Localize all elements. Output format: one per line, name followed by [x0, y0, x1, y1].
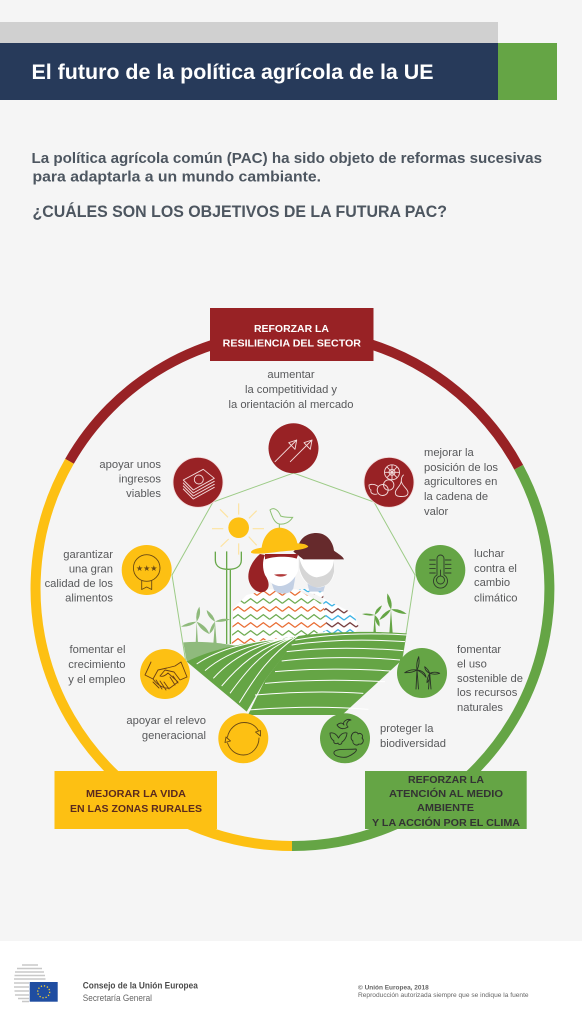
- man figure: [293, 533, 359, 637]
- label: resources: [457, 644, 523, 714]
- label: resources: los recursos: [457, 687, 518, 699]
- icon: handshake: [140, 649, 190, 699]
- objectives ring: [36, 332, 549, 846]
- label: climate: [474, 548, 518, 604]
- logo: Council of the EU: [14, 965, 58, 1002]
- intro text: para adaptarla a un mundo cambiante.: [32, 170, 321, 186]
- footer: [0, 941, 582, 1024]
- icon: banknotes: [173, 457, 223, 507]
- label: food quality: [45, 549, 113, 604]
- icon: fruit: [364, 457, 414, 507]
- label: growth: y el empleo: [68, 674, 126, 686]
- box: environment and climate: REFORZAR LA: [408, 775, 484, 786]
- label: income: apoyar unos: [99, 459, 161, 471]
- icon: cycle arrows: [218, 713, 268, 763]
- label: income: viables: [126, 488, 161, 500]
- icon: pitchfork: [215, 551, 241, 644]
- icon: wind turbines: [397, 648, 447, 698]
- label: biodiversity: [380, 723, 446, 750]
- box: resilience: REFORZAR LA: [254, 324, 329, 335]
- icon: biodiversity: [320, 713, 370, 763]
- objective: farmers in value chain: [364, 447, 498, 518]
- box: environment and climate: AMBIENTE: [417, 803, 474, 814]
- label: farmers: posición de los: [424, 462, 498, 474]
- icon: arrows up: [268, 423, 318, 473]
- intro text: La política agrícola común (PAC) ha sido objeto de reformas sucesivas: [32, 151, 542, 167]
- box: resilience: RESILIENCIA DEL SECTOR: [223, 338, 362, 350]
- label: farmers: mejorar la: [424, 447, 475, 459]
- box: environment and climate: [365, 771, 527, 829]
- icon: sun: [212, 503, 264, 555]
- field left: [183, 637, 298, 712]
- label: competitiveness: aumentar: [267, 369, 315, 381]
- label: food quality: garantizar: [63, 549, 113, 561]
- copyright: © Unión Europea, 2018: [358, 983, 429, 991]
- objective: generational renewal: [126, 713, 268, 763]
- objective: viable income: [99, 457, 223, 507]
- copyright: [358, 983, 529, 999]
- label: food quality: una gran: [69, 564, 113, 576]
- label: resources: sostenible de: [457, 673, 523, 685]
- intro text: [32, 151, 542, 186]
- question heading: ¿CUÁLES SON LOS OBJETIVOS DE LA FUTURA PAC?: [32, 202, 447, 221]
- icon: thermometer: [415, 545, 465, 595]
- label: growth: crecimiento: [68, 659, 126, 671]
- central illustration: [181, 503, 407, 715]
- label: climate: luchar: [474, 548, 505, 560]
- objective: biodiversity: [320, 713, 446, 763]
- box: resilience: [210, 308, 374, 361]
- field right: [248, 632, 407, 715]
- label: biodiversity: biodiversidad: [380, 738, 446, 750]
- copyright: Reproducción autorizada siempre que se indique la fuente: [358, 992, 529, 999]
- header band: [0, 22, 557, 100]
- objective: food quality: [45, 545, 172, 604]
- icon: bird: [270, 509, 293, 529]
- objective: competitiveness: [228, 369, 354, 473]
- label: competitiveness: la competitividad y: [245, 384, 337, 396]
- icon: wind turbines left: [181, 607, 230, 644]
- label: income: [99, 459, 161, 500]
- secretariat: Secretaría General: [83, 993, 152, 1003]
- label: food quality: alimentos: [65, 592, 113, 604]
- label: competitiveness: la orientación al mercado: [228, 399, 354, 411]
- label: income: ingresos: [119, 474, 161, 486]
- label: climate: contra el: [474, 563, 517, 575]
- label: resources: fomentar: [457, 644, 501, 656]
- label: farmers: [424, 447, 498, 518]
- label: food quality: calidad de los: [45, 578, 113, 590]
- box: rural areas: EN LAS ZONAS RURALES: [70, 804, 202, 815]
- label: farmers: la cadena de: [424, 491, 488, 503]
- label: farmers: valor: [424, 506, 449, 518]
- council name: Consejo de la Unión Europea: [83, 981, 199, 991]
- label: resources: naturales: [457, 702, 503, 714]
- box: environment and climate: Y LA ACCIÓN POR EL CLIMA: [372, 816, 521, 829]
- icon: wind turbines right: [362, 593, 407, 633]
- label: renewal: [126, 715, 206, 742]
- icon: medal: ★★★: [136, 564, 157, 573]
- box: rural areas: [54, 771, 217, 829]
- label: climate: climático: [474, 592, 518, 604]
- label: climate: cambio: [474, 577, 510, 589]
- objective: climate: [415, 545, 518, 604]
- label: renewal: generacional: [142, 730, 206, 742]
- box: environment and climate: ATENCIÓN AL MEDIO: [389, 787, 503, 800]
- label: biodiversity: proteger la: [380, 723, 434, 735]
- heptagon outline: [172, 473, 415, 660]
- label: renewal: apoyar el relevo: [126, 715, 206, 727]
- title: El futuro de la política agrícola de la UE: [32, 61, 433, 84]
- label: resources: el uso: [457, 658, 487, 670]
- objective: growth and employment: [68, 644, 190, 699]
- woman figure: [232, 528, 327, 645]
- label: growth: fomentar el: [70, 644, 126, 656]
- label: competitiveness: [228, 369, 354, 411]
- label: farmers: agricultores en: [424, 476, 497, 488]
- box: rural areas: MEJORAR LA VIDA: [86, 789, 187, 800]
- label: growth: [68, 644, 126, 686]
- objective: natural resources: [397, 644, 523, 714]
